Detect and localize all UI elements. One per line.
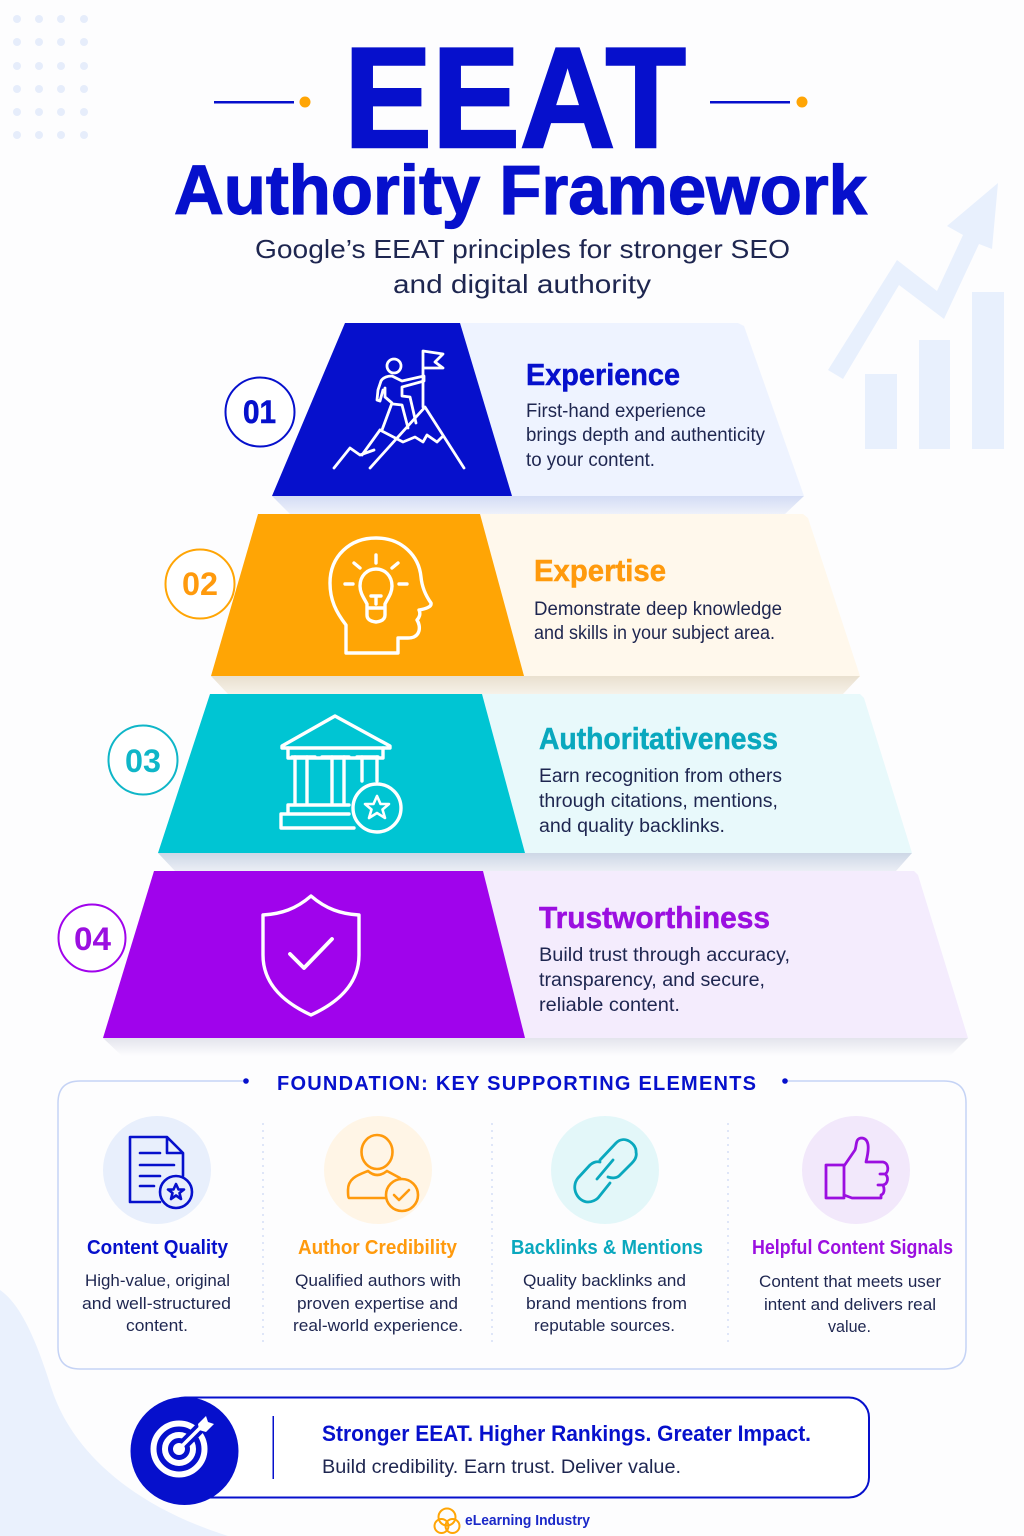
icon: author with check (348, 1135, 418, 1211)
tier 1: Experience (226, 323, 804, 514)
number badge 02: 02 (182, 566, 218, 602)
title: EEAT: EEAT (344, 19, 686, 178)
text: Trustworthiness body (539, 945, 790, 1016)
item: Helpful Content Signals: intent and delivers real (764, 1295, 936, 1314)
title accent left (214, 96, 310, 108)
heading: foundation: FOUNDATION: KEY SUPPORTING ELEMENTS (277, 1073, 756, 1095)
number badge 03: 03 (125, 743, 161, 779)
tier 4: Trustworthiness (58, 871, 968, 1056)
item: Backlinks and Mentions: Backlinks & Mentions (511, 1237, 703, 1259)
decorative dot grid (13, 15, 88, 139)
text: Trustworthiness body: transparency, and secure, (539, 970, 765, 991)
number badge 04 (58, 904, 126, 972)
icon: institution with star badge (281, 716, 401, 832)
item: Content Quality: content. (126, 1316, 188, 1335)
heading: Trustworthiness: Trustworthiness (539, 900, 770, 935)
heading: Authoritativeness: Authoritativeness (539, 721, 778, 756)
item: Backlinks and Mentions: Quality backlinks and (523, 1271, 686, 1290)
icon: thumbs up (826, 1138, 888, 1198)
item: Backlinks and Mentions: brand mentions from (526, 1294, 687, 1313)
icon: chain link (575, 1140, 636, 1202)
item: Content Quality: Content Quality (87, 1237, 229, 1259)
item: Author Credibility: Author Credibility (298, 1237, 458, 1259)
logo: eLearning Industry (434, 1508, 591, 1533)
text: Experience body (526, 401, 765, 471)
text: Authoritativeness body (539, 766, 782, 837)
item: Helpful Content Signals: Content that meets user (759, 1272, 941, 1291)
subtitle: and digital authority (393, 269, 651, 299)
title accent right (710, 96, 808, 108)
icon: head with lightbulb (330, 538, 431, 653)
text: Expertise body: and skills in your subject area. (534, 623, 775, 644)
item: Helpful Content Signals: value. (828, 1317, 871, 1336)
text: Experience body: First-hand experience (526, 401, 706, 422)
item: Backlinks and Mentions (511, 1116, 703, 1335)
item: Content Quality: and well-structured (82, 1294, 231, 1313)
item: Helpful Content Signals: Helpful Content Signals (752, 1237, 953, 1259)
text: Trustworthiness body: reliable content. (539, 995, 680, 1016)
number badge 04: 04 (74, 921, 111, 957)
item: Helpful Content Signals (752, 1116, 953, 1336)
number badge 02 (166, 550, 234, 618)
item: Author Credibility: real-world experience. (293, 1316, 463, 1335)
number badge 03 (108, 726, 178, 794)
logo: eLearning Industry: eLearning Industry (465, 1512, 591, 1529)
callout banner (130, 1397, 869, 1505)
item: Content Quality (82, 1116, 231, 1335)
title: Authority Framework: Authority Framework (174, 151, 867, 229)
decorative corner blob (0, 1290, 228, 1536)
subtitle (255, 234, 790, 299)
text: Trustworthiness body: Build trust through accuracy, (539, 945, 790, 966)
text: Expertise body: Demonstrate deep knowledge (534, 599, 782, 620)
panel: foundation (58, 1073, 966, 1369)
callout banner: Stronger EEAT. Higher Rankings. Greater Impact. (322, 1421, 811, 1446)
tier 3: Authoritativeness (108, 694, 912, 871)
heading: Experience: Experience (526, 357, 680, 392)
text: Authoritativeness body: and quality backlinks. (539, 816, 725, 837)
text: Experience body: brings depth and authenticity (526, 425, 765, 446)
number badge 01: 01 (243, 394, 276, 430)
item: Author Credibility: proven expertise and (297, 1294, 458, 1313)
icon: target with arrow (154, 1416, 214, 1474)
icon: document with star (130, 1137, 192, 1208)
item: Backlinks and Mentions: reputable sources. (534, 1316, 675, 1335)
icon: climber on mountain (334, 351, 464, 468)
decorative growth chart (828, 183, 1004, 449)
text: Expertise body (534, 599, 782, 644)
subtitle: Google’s EEAT principles for stronger SEO (255, 234, 790, 264)
item: Content Quality: High-value, original (85, 1271, 230, 1290)
icon: shield with check (263, 896, 359, 1015)
text: Authoritativeness body: through citations, mentions, (539, 791, 778, 812)
text: Authoritativeness body: Earn recognition from others (539, 766, 782, 787)
item: Author Credibility: Qualified authors with (295, 1271, 461, 1290)
heading: Expertise: Expertise (534, 553, 666, 588)
tier 2: Expertise (166, 514, 860, 694)
number badge 01 (226, 378, 294, 446)
text: Experience body: to your content. (526, 450, 655, 471)
item: Author Credibility (293, 1116, 463, 1335)
callout banner: Build credibility. Earn trust. Deliver value. (322, 1457, 681, 1478)
